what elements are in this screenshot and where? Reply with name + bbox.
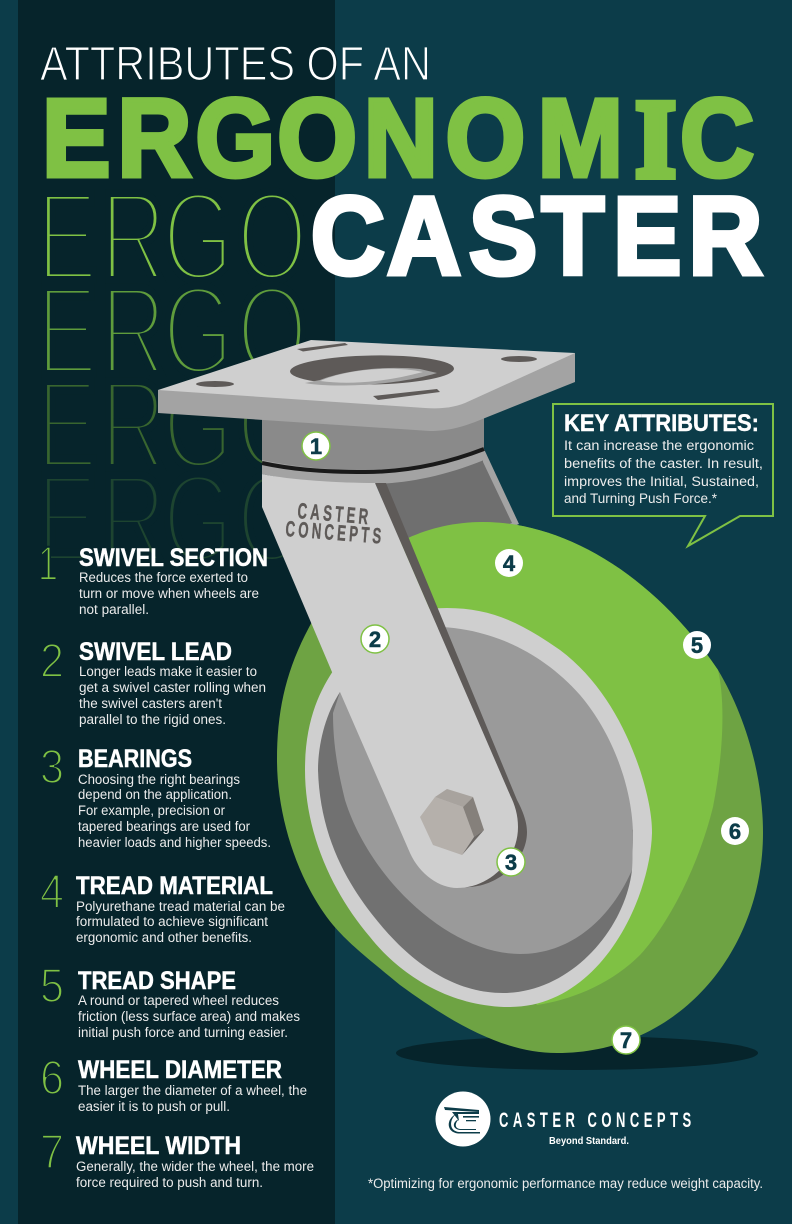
marker 5: 5 [691,633,703,658]
item 3: bearings [40,741,271,850]
footnote: *Optimizing for ergonomic performance may reduce weight capacity. [368,1176,763,1191]
repeated ergo background lettering: ERGO [37,356,307,496]
repeated ergo background lettering: ERGO [37,168,307,308]
item 5: tread shape: A round or tapered wheel reduces [78,993,279,1008]
axle bolt [420,789,484,855]
item 7: wheel width: 7 [40,1126,64,1179]
item 4: tread material [40,866,285,945]
item 3: bearings: 3 [40,741,64,794]
marker 7 [612,1026,640,1054]
item 2: swivel lead [40,635,266,727]
item 7: wheel width: Generally, the wider the wheel, the more [76,1159,314,1174]
marker 1: 1 [310,434,322,459]
marker 6 [721,817,749,845]
item 3: bearings: Choosing the right bearings [78,772,240,787]
logo mark [444,1107,480,1134]
marker 2: 2 [369,627,381,652]
item 7: wheel width: force required to push and turn. [76,1175,263,1190]
item 5: tread shape: initial push force and turning easier. [78,1025,288,1040]
wheel rim [305,608,652,1007]
wheel tread face [400,522,722,1005]
item 1: swivel section: SWIVEL SECTION [79,544,268,572]
front fork leg [262,474,518,888]
item 3: bearings: depend on the application. [78,787,232,802]
marker 5 [683,631,711,659]
callout: key attributes: It can increase the ergonomic [564,438,754,453]
wheel hub [333,627,633,954]
top plate [158,340,575,431]
item 7: wheel width: WHEEL WIDTH [76,1132,241,1160]
item 1: swivel section: not parallel. [79,602,149,617]
title: caster: CASTER [311,175,762,298]
callout: key attributes: improves the Initial, Sustained, [564,474,759,489]
raceway seal ring [262,449,484,472]
marker 4 [495,549,523,577]
repeated ergo background lettering: ERGO [37,262,307,402]
item 7: wheel width [40,1126,314,1190]
logo: caster concepts: CASTER CONCEPTS [499,1108,691,1132]
item 5: tread shape: 5 [40,960,64,1013]
item 2: swivel lead: 2 [40,635,64,688]
marker 7: 7 [620,1028,632,1053]
marker 3 [497,848,525,876]
marker 6: 6 [729,819,741,844]
fork edge [375,483,527,888]
title: ergonomic: ERGONOMIC [42,77,754,200]
item 6: wheel diameter: The larger the diameter of a wheel, the [78,1083,307,1098]
callout: key attributes [553,404,773,546]
item 3: bearings: heavier loads and higher speeds. [78,835,271,850]
item 5: tread shape [40,960,300,1040]
item 6: wheel diameter: 6 [40,1052,64,1105]
swivel lower band [262,448,484,484]
fork brand text: CASTER [297,499,369,529]
wheel side tread [277,522,763,1053]
item 4: tread material: formulated to achieve significant [76,914,268,929]
item 1: swivel section: 1 [38,538,58,591]
item 4: tread material: Polyurethane tread material can be [76,899,285,914]
dark side panel [18,0,335,1224]
item 6: wheel diameter: easier it is to push or pull. [78,1099,230,1114]
caster illustration [158,340,763,1053]
callout: key attributes: KEY ATTRIBUTES: [564,410,759,437]
fork brand text: CONCEPTS [285,517,382,548]
rim inner shadow [318,627,633,993]
logo: caster concepts [436,1092,691,1147]
repeated ergo background lettering [37,168,307,590]
item 4: tread material: TREAD MATERIAL [76,872,273,900]
logo: caster concepts: Beyond Standard. [549,1136,629,1147]
back fork leg [375,449,519,560]
item 2: swivel lead: get a swivel caster rolling when [79,680,266,695]
item 5: tread shape: friction (less surface area) and makes [78,1009,300,1024]
floor shadow [396,1036,758,1070]
fork brand text [285,499,382,548]
item 1: swivel section [38,538,268,617]
marker 3: 3 [505,850,517,875]
item 3: bearings: tapered bearings are used for [78,819,251,834]
callout: key attributes: benefits of the caster. In result, [564,456,763,471]
item 2: swivel lead: the swivel casters aren't [79,696,222,711]
title line: attributes of an: ATTRIBUTES OF AN [40,38,431,91]
item 5: tread shape: TREAD SHAPE [78,967,236,995]
item 2: swivel lead: parallel to the rigid ones. [79,712,226,727]
swivel housing [262,415,484,472]
item 1: swivel section: Reduces the force exerted to [79,570,248,585]
item 4: tread material: ergonomic and other benefits. [76,930,252,945]
repeated ergo background lettering: ERGO [37,450,307,590]
item 4: tread material: 4 [40,866,64,919]
item 6: wheel diameter [40,1052,307,1114]
marker 4: 4 [503,551,516,576]
item 6: wheel diameter: WHEEL DIAMETER [78,1056,282,1084]
item 2: swivel lead: SWIVEL LEAD [79,638,232,666]
marker 1 [302,432,330,460]
marker 2 [361,625,389,653]
callout: key attributes: and Turning Push Force.* [564,491,717,506]
item 1: swivel section: turn or move when wheels are [79,586,259,601]
item 2: swivel lead: Longer leads make it easier to [79,664,257,679]
item 3: bearings: For example, precision or [78,803,226,818]
item 3: bearings: BEARINGS [78,745,192,773]
